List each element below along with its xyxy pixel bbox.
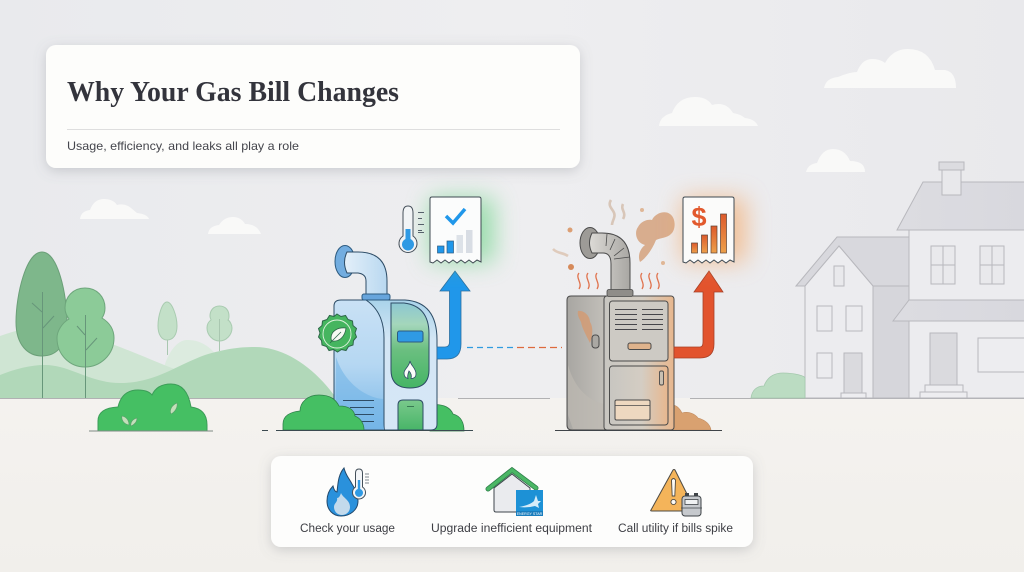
house: upper windows xyxy=(931,246,1004,284)
clouds xyxy=(80,49,956,234)
heater vents xyxy=(343,400,374,422)
heater green panel xyxy=(391,303,429,388)
receipt rising bars xyxy=(692,214,726,253)
icon: gas meter xyxy=(681,493,702,516)
heater pipe cap xyxy=(335,246,355,278)
eco badge xyxy=(318,314,356,352)
tree: small far round xyxy=(207,306,232,351)
furnace front xyxy=(604,296,674,430)
tree: small far egg xyxy=(158,302,177,355)
house background xyxy=(796,162,1024,398)
house: small step xyxy=(841,393,866,398)
bush: foreground left xyxy=(89,384,213,431)
heat squiggles xyxy=(578,273,659,289)
house: porch roof xyxy=(893,300,1024,321)
efficient arrow up xyxy=(437,271,470,359)
house: main roof xyxy=(897,182,1024,230)
high bill receipt xyxy=(683,197,734,263)
house: steps xyxy=(920,385,967,398)
label: Upgrade inefficient equipment xyxy=(431,523,593,535)
house: wide window xyxy=(978,338,1024,372)
heater light swoosh xyxy=(336,357,384,429)
furnace side highlight xyxy=(568,365,604,429)
heater flame xyxy=(404,361,416,378)
heater pipe xyxy=(344,252,387,295)
ground line xyxy=(0,398,1024,400)
house: small upper right window xyxy=(846,306,862,331)
icon: energy star logo: ENERGY STAR xyxy=(517,512,543,516)
house: large wall xyxy=(909,230,1024,398)
icon: thermometer xyxy=(353,469,369,499)
furnace louvers xyxy=(615,310,663,330)
green glow xyxy=(430,198,494,262)
house: small lower window xyxy=(817,353,832,378)
thermometer xyxy=(399,206,424,252)
furnace pipe xyxy=(590,233,630,290)
dashed connector: orange xyxy=(517,346,562,348)
bush: by house xyxy=(751,373,805,398)
furnace side handle xyxy=(592,335,599,348)
house: small gabled attic window xyxy=(834,266,844,286)
furnace side xyxy=(567,296,606,430)
heater flange xyxy=(362,294,390,300)
house: chimney front xyxy=(942,170,961,195)
receipt check mark xyxy=(446,209,465,223)
house: small door xyxy=(844,353,862,393)
ground xyxy=(0,398,1024,572)
tree: tall dark xyxy=(16,252,67,398)
heater bush right xyxy=(430,405,464,431)
receipt dollar sign: $ xyxy=(691,202,707,232)
action: check your usage xyxy=(300,468,395,535)
label: Check your usage xyxy=(300,523,395,535)
label: Call utility if bills spike xyxy=(618,523,733,535)
inefficient arrow up xyxy=(674,271,723,358)
action card xyxy=(271,456,753,547)
inefficient furnace xyxy=(555,228,722,430)
heater body back xyxy=(334,300,392,430)
furnace flange xyxy=(607,290,633,296)
title: Why Your Gas Bill Changes xyxy=(67,77,399,108)
furnace ground line xyxy=(555,430,722,432)
subtitle: Usage, efficiency, and leaks all play a role xyxy=(67,139,299,153)
efficient water heater xyxy=(262,246,473,431)
icon: energy star logo xyxy=(516,490,543,516)
title card xyxy=(46,45,580,168)
icon: flame xyxy=(327,468,358,516)
heater front panel xyxy=(366,300,437,430)
furnace panel handle xyxy=(628,343,651,350)
orange glow xyxy=(682,198,746,262)
furnace lower panel xyxy=(610,366,668,425)
heater bush left xyxy=(283,395,364,430)
furnace hatch xyxy=(615,400,650,420)
house: small gabled wall xyxy=(805,246,873,398)
heater lower door xyxy=(398,400,423,430)
dashed connector: blue xyxy=(467,346,515,348)
smoke plumes xyxy=(553,200,675,270)
heater display xyxy=(398,331,423,342)
house: side section shade wall xyxy=(873,286,909,398)
background sky xyxy=(0,0,1024,399)
furnace door latch xyxy=(660,371,664,385)
icon: warning triangle xyxy=(651,470,695,511)
title divider xyxy=(67,129,560,130)
furnace upper panel xyxy=(610,301,668,361)
heater ground line xyxy=(262,430,473,432)
receipt bars xyxy=(438,246,444,253)
house: small upper left window xyxy=(817,306,832,331)
furnace soot stain xyxy=(578,311,592,343)
furnace pipe cap xyxy=(580,228,600,258)
house: chimney xyxy=(939,162,964,195)
furnace dirt pile xyxy=(672,405,711,430)
action: call utility xyxy=(618,470,733,535)
house: side section roof xyxy=(796,237,909,286)
tree: round xyxy=(57,288,114,398)
good bill receipt xyxy=(430,197,481,263)
hills xyxy=(0,328,336,398)
action: upgrade equipment xyxy=(431,470,593,535)
icon: house xyxy=(488,470,536,512)
house: door xyxy=(930,333,957,385)
